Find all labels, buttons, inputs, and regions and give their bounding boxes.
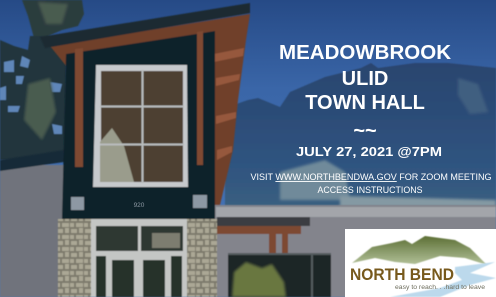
logo tagline: easy to reach. . .hard to leave bbox=[395, 284, 485, 291]
tilde divider: ~~ bbox=[353, 120, 377, 142]
soffit highlights bbox=[214, 48, 244, 160]
logo wordmark: NORTH BEND bbox=[350, 265, 454, 284]
stone left bbox=[58, 219, 92, 297]
door frame bbox=[91, 219, 187, 297]
doors and sidelights bbox=[96, 256, 182, 297]
access instructions bbox=[250, 172, 491, 195]
mountain range bbox=[225, 63, 496, 210]
window reflections bbox=[100, 128, 134, 182]
shrub bbox=[232, 262, 286, 297]
dark upper wall bbox=[62, 31, 215, 219]
ground-floor window bbox=[228, 253, 331, 297]
tree behind building bbox=[0, 0, 84, 160]
large window glass bbox=[101, 71, 183, 182]
North Bend logo bbox=[345, 229, 496, 297]
window mullions bbox=[100, 70, 184, 183]
address number: 920 bbox=[134, 202, 145, 209]
logo river bbox=[390, 262, 496, 297]
window grid bbox=[228, 253, 331, 297]
event date: JULY 27, 2021 @7PM bbox=[296, 144, 442, 159]
headline bbox=[279, 42, 452, 114]
headline: TOWN HALL bbox=[305, 92, 425, 114]
eave soffit bbox=[50, 14, 250, 205]
right wing fascia bbox=[216, 207, 496, 217]
transom windows bbox=[96, 226, 183, 251]
transom reflection bbox=[152, 233, 180, 248]
left wing roof bbox=[0, 150, 64, 171]
logo mountains bbox=[352, 236, 487, 265]
headline: MEADOWBROOK bbox=[279, 42, 452, 64]
right wing wall bbox=[214, 205, 496, 297]
main roof bbox=[40, 3, 250, 48]
stone right bbox=[187, 219, 217, 297]
headline: ULID bbox=[342, 68, 388, 90]
logo panel bbox=[345, 229, 496, 297]
square vents bbox=[71, 195, 207, 210]
left wing siding bbox=[0, 165, 64, 297]
canopy beams bbox=[217, 226, 301, 297]
access instructions: ACCESS INSTRUCTIONS bbox=[318, 185, 422, 195]
canopy bbox=[217, 217, 310, 226]
large window frame bbox=[93, 65, 188, 187]
access instructions: VISIT WWW.NORTHBENDWA.GOV FOR ZOOM MEETING bbox=[250, 172, 491, 182]
cedar posts bbox=[75, 31, 203, 167]
